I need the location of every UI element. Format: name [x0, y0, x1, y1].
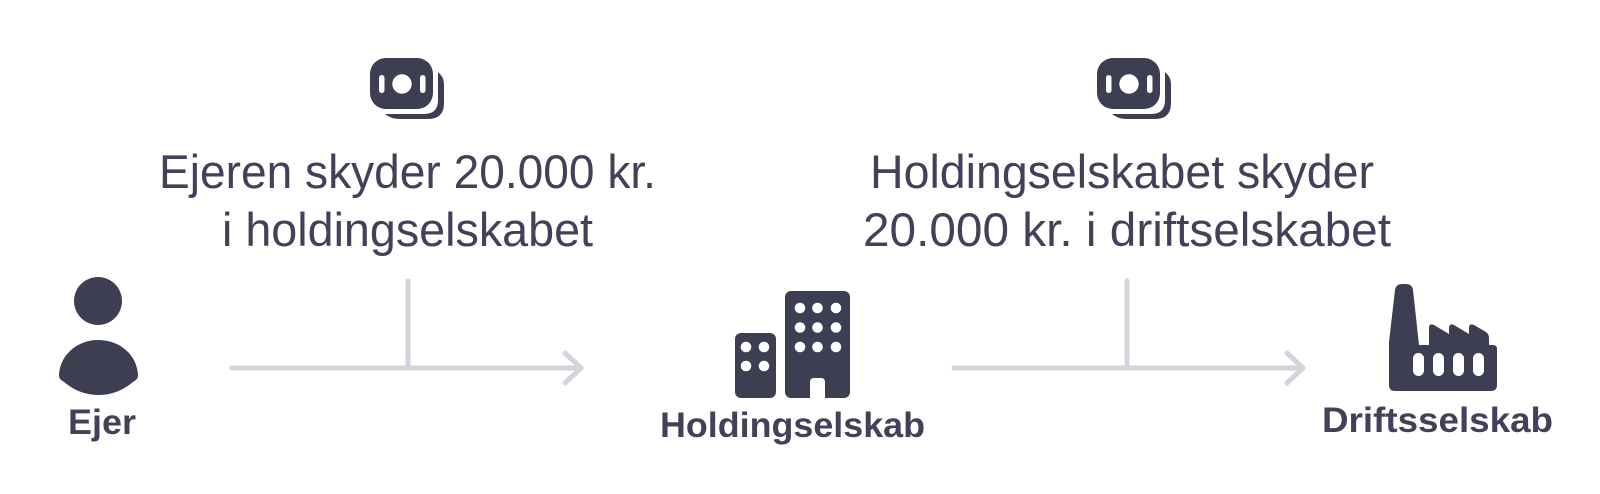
text: holding company injects capital — [863, 145, 1391, 256]
arrow: holding company to operating company — [954, 281, 1303, 383]
icon: person — [59, 277, 138, 395]
arrow: owner to holding company — [232, 281, 581, 383]
icon: money stack left — [370, 58, 444, 119]
label: Holdingselskab: Holdingselskab — [660, 406, 925, 445]
text: owner injects capital: i holdingselskabet — [222, 203, 593, 256]
label: Driftsselskab: Driftsselskab — [1322, 401, 1553, 440]
label: Ejer: Ejer — [68, 403, 136, 442]
text: holding company injects capital: Holdingselskabet skyder — [870, 145, 1374, 198]
icon: money stack right — [1097, 58, 1171, 119]
text: owner injects capital — [159, 145, 656, 256]
icon: factory — [1389, 284, 1497, 391]
text: holding company injects capital: 20.000 kr. i driftselskabet — [863, 203, 1391, 256]
text: owner injects capital: Ejeren skyder 20.000 kr. — [159, 145, 656, 198]
icon: office buildings — [735, 291, 850, 398]
